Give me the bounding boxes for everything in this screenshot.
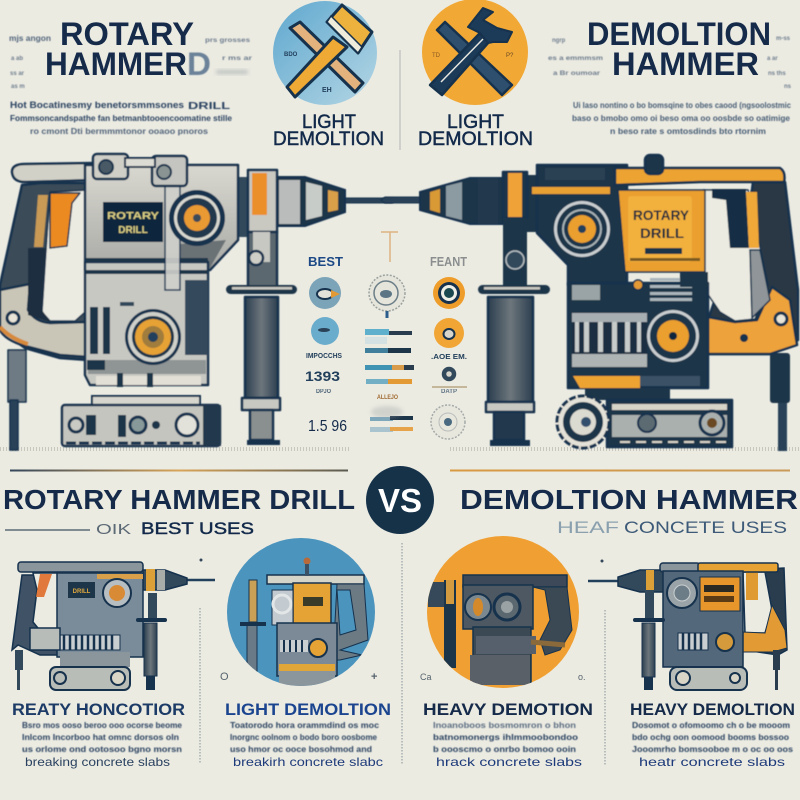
caption column 3: heavy demolition: HEAVY DEMOTION bbox=[423, 700, 593, 719]
drill bit bbox=[340, 198, 398, 203]
dotted dividers bbox=[200, 543, 605, 765]
heading: demolition hammer: DEMOLTION HAMMER bbox=[460, 484, 798, 515]
caption column 4: heavy demolition: Jooomrho bomsooboe m o oc oo oos bbox=[632, 745, 794, 754]
caption column 3: heavy demolition bbox=[423, 700, 593, 769]
icon: left dial two bbox=[311, 317, 339, 345]
subheading: best uses: OIK bbox=[96, 521, 131, 538]
caption column 3: heavy demolition: b oooscmo o onrbo bomoo ooin bbox=[433, 745, 576, 754]
caption column 1: heavy function: us orlome ond ootosoo bgno morsn bbox=[22, 745, 182, 754]
subheading: heavy concrete uses bbox=[557, 518, 787, 537]
icon: blue circle crossed hammer: BDO bbox=[284, 52, 298, 58]
side grip bbox=[226, 170, 297, 445]
orange label panel bbox=[618, 190, 705, 272]
number: 15 96: 1.5 96 bbox=[308, 418, 347, 435]
caption column 1: heavy function: Bsro mos ooso beroo ooo ocorse beome bbox=[22, 721, 183, 730]
side notes right: ns bbox=[784, 84, 792, 90]
icon: orange circle crossed wrench bbox=[422, 0, 528, 105]
heading: rotary hammer: ROTARY bbox=[60, 16, 194, 52]
top knobs bbox=[93, 154, 187, 186]
label: light demolition right: DEMOLTION bbox=[418, 129, 533, 150]
side notes right: a Br oumoar bbox=[553, 71, 601, 77]
side grip bbox=[478, 172, 550, 446]
description: demolition hammer: baso o bmobo omo oi beso oma oo oosbde so oatimige bbox=[572, 114, 791, 123]
wheel lower bbox=[647, 310, 699, 362]
label plate: rotary drill: DRILL bbox=[118, 225, 148, 236]
handle bbox=[703, 182, 798, 354]
shading behind lower bars bbox=[371, 406, 403, 418]
vs badge bbox=[366, 466, 434, 534]
bars bbox=[365, 329, 414, 432]
chuck bbox=[277, 177, 345, 226]
icon: center gauge bbox=[369, 275, 405, 318]
icon: right dial two bbox=[434, 318, 464, 348]
label: light demolition left: LIGHT bbox=[302, 112, 356, 133]
caption column 4: heavy demolition: Dosomot o ofomoomo ch o be mooom bbox=[632, 721, 790, 730]
image circle: orange tool bbox=[420, 536, 586, 688]
small drill left bbox=[12, 562, 215, 690]
number: 1393: 1393 bbox=[305, 368, 340, 384]
small drill right bbox=[588, 563, 787, 690]
line right bbox=[432, 386, 467, 388]
icon: blue circle crossed hammer: EH bbox=[322, 87, 332, 94]
wheel upper bbox=[169, 190, 225, 246]
orange label panel: DRILL bbox=[640, 225, 684, 241]
icon: right ring bbox=[444, 369, 454, 379]
subheading: best uses: BEST USES bbox=[141, 519, 254, 538]
description: demolition hammer bbox=[572, 101, 792, 136]
image circle: blue tool: + bbox=[371, 671, 377, 683]
body bbox=[525, 165, 784, 388]
side notes small: as m bbox=[11, 84, 25, 90]
rules bbox=[10, 470, 348, 472]
ground shadow bbox=[0, 447, 800, 451]
heading: rotary hammer: D bbox=[187, 46, 211, 82]
note marks: Ca bbox=[420, 672, 432, 682]
gear wheel bbox=[557, 396, 609, 448]
cord bbox=[770, 353, 790, 451]
description: rotary hammer: Hot Bocatinesmy benetorsmmsones bbox=[10, 100, 184, 110]
right demolition drill illustration bbox=[381, 155, 798, 451]
side notes right: ns ths bbox=[768, 71, 786, 77]
small labels: .AOE EM. bbox=[431, 354, 467, 361]
label plate: rotary drill: ROTARY bbox=[107, 211, 159, 222]
caption column 3: heavy demolition: hrack concrete slabs bbox=[436, 755, 582, 769]
side notes small: r ms ar bbox=[222, 56, 253, 62]
cord bbox=[8, 350, 26, 450]
caption column 2: light demolition: Toatorodo hora orammdind os moc bbox=[230, 721, 380, 730]
side notes right bbox=[548, 36, 792, 90]
left rotary drill illustration bbox=[0, 154, 398, 450]
body bbox=[12, 160, 250, 387]
label: light demolition left: DEMOLTION bbox=[273, 129, 384, 150]
base bbox=[585, 388, 732, 447]
heading: rotary hammer bbox=[45, 16, 211, 82]
caption column 1: heavy function: REATY HONCOTIOR bbox=[12, 700, 185, 719]
caption column 2: light demolition: Inorgnc oolnom o bodo boro oosbome bbox=[230, 733, 378, 742]
image circle: blue tool bbox=[220, 538, 377, 686]
caption column 4: heavy demolition bbox=[630, 700, 795, 769]
description: rotary hammer: ro cmont Dti bermmmtonor ooaoo pnoros bbox=[30, 127, 209, 136]
caption column 3: heavy demolition: batnomonergs ihlmmoobondoo bbox=[433, 733, 578, 742]
label: feant: FEANT bbox=[430, 254, 467, 269]
label: best: BEST bbox=[308, 254, 343, 269]
caption column 3: heavy demolition: Inoanoboos bosmomron o bhon bbox=[433, 721, 576, 730]
side notes small: ss ar bbox=[10, 71, 25, 77]
label: light demolition right bbox=[418, 112, 533, 150]
description: rotary hammer bbox=[10, 100, 233, 136]
icon: right dial one bbox=[433, 277, 465, 309]
caption column 2: light demolition bbox=[225, 700, 391, 769]
top knob bbox=[645, 155, 663, 174]
caption column 2: light demolition: uso hmor oc ooce bosohmod and bbox=[230, 745, 372, 754]
side notes left: mjs angon bbox=[9, 34, 51, 43]
orange label panel: ROTARY bbox=[633, 207, 690, 223]
smear beside heading bbox=[216, 70, 248, 74]
note marks: O bbox=[220, 671, 229, 683]
small labels: DPJO bbox=[316, 389, 331, 395]
heading: rotary hammer: HAMMER bbox=[45, 46, 187, 82]
small labels bbox=[306, 353, 467, 401]
description: demolition hammer: n beso rate s omtosdinds bto rtornim bbox=[610, 127, 766, 136]
label: light demolition right: LIGHT bbox=[447, 112, 504, 133]
caption column 1: heavy function: Inlcom Incorboo hat omnc dorsos oln bbox=[22, 733, 179, 742]
description: demolition hammer: Ui laso nontino o bo bomsqine to obes caood (ngsoolostmic bbox=[573, 101, 792, 110]
heading: demolition hammer: HAMMER bbox=[612, 46, 759, 82]
chuck bbox=[420, 178, 503, 224]
caption column 4: heavy demolition: bdo ochg oon oomood booms bossoo bbox=[632, 733, 789, 742]
icon: left dial one bbox=[309, 277, 341, 309]
center comparison column bbox=[305, 232, 467, 439]
wheel upper bbox=[554, 201, 610, 257]
caption column 2: light demolition: LIGHT DEMOLTION bbox=[225, 700, 391, 719]
small labels: ALLEJO bbox=[377, 395, 398, 401]
handle bbox=[0, 183, 88, 360]
heading: demolition hammer: DEMOLTION bbox=[587, 16, 771, 52]
side notes right: m-ss bbox=[776, 36, 791, 42]
description: rotary hammer: Fommsoncandspathe fan betmanbtooencoomatine stille bbox=[10, 114, 233, 123]
vs badge: VS bbox=[378, 482, 422, 519]
base bbox=[62, 396, 221, 446]
panel: demolition hammer header bbox=[548, 16, 792, 136]
caption column 4: heavy demolition: heatr concrete slabs bbox=[639, 755, 785, 769]
icon: blue circle crossed hammer bbox=[273, 1, 377, 105]
small labels: IMPOCCHS bbox=[306, 353, 342, 360]
image circle: orange tool: o. bbox=[578, 672, 586, 682]
caption column 1: heavy function bbox=[12, 700, 185, 769]
subheading: best uses bbox=[5, 519, 254, 538]
side notes right: a ar bbox=[767, 56, 778, 62]
icon: right lower gauge bbox=[431, 405, 465, 439]
label: light demolition left bbox=[273, 112, 384, 150]
heading: demolition hammer bbox=[587, 16, 771, 82]
divider top bbox=[399, 50, 401, 150]
heading: rotary hammer drill: ROTARY HAMMER DRILL bbox=[3, 484, 355, 515]
caption column 4: heavy demolition: HEAVY DEMOLTION bbox=[630, 700, 795, 719]
side notes small: a ab bbox=[11, 56, 23, 62]
subheading: heavy concrete uses: HEAF bbox=[557, 518, 619, 537]
side notes small bbox=[10, 38, 253, 90]
subheading: heavy concrete uses: CONCETE USES bbox=[624, 518, 787, 537]
caption column 1: heavy function: breaking concrete slabs bbox=[25, 755, 170, 769]
drill bit bbox=[381, 197, 462, 203]
pointer top bbox=[381, 232, 398, 262]
side notes small: prs grosses bbox=[205, 38, 251, 44]
caption column 2: light demolition: breakirh concrete slabc bbox=[233, 755, 383, 769]
description: rotary hammer: DRILL bbox=[188, 101, 230, 112]
icon: orange circle crossed wrench: TD bbox=[432, 53, 441, 59]
small drill left: DRILL bbox=[73, 589, 91, 595]
side notes right: ngrp bbox=[552, 38, 566, 44]
wheel lower bbox=[125, 309, 181, 365]
side notes right: es a emmmsm bbox=[548, 56, 603, 62]
small labels: DATP bbox=[441, 389, 457, 395]
icon: orange circle crossed wrench: P? bbox=[506, 53, 514, 59]
label plate: rotary drill bbox=[103, 202, 163, 242]
panel: rotary hammer header bbox=[9, 16, 253, 136]
